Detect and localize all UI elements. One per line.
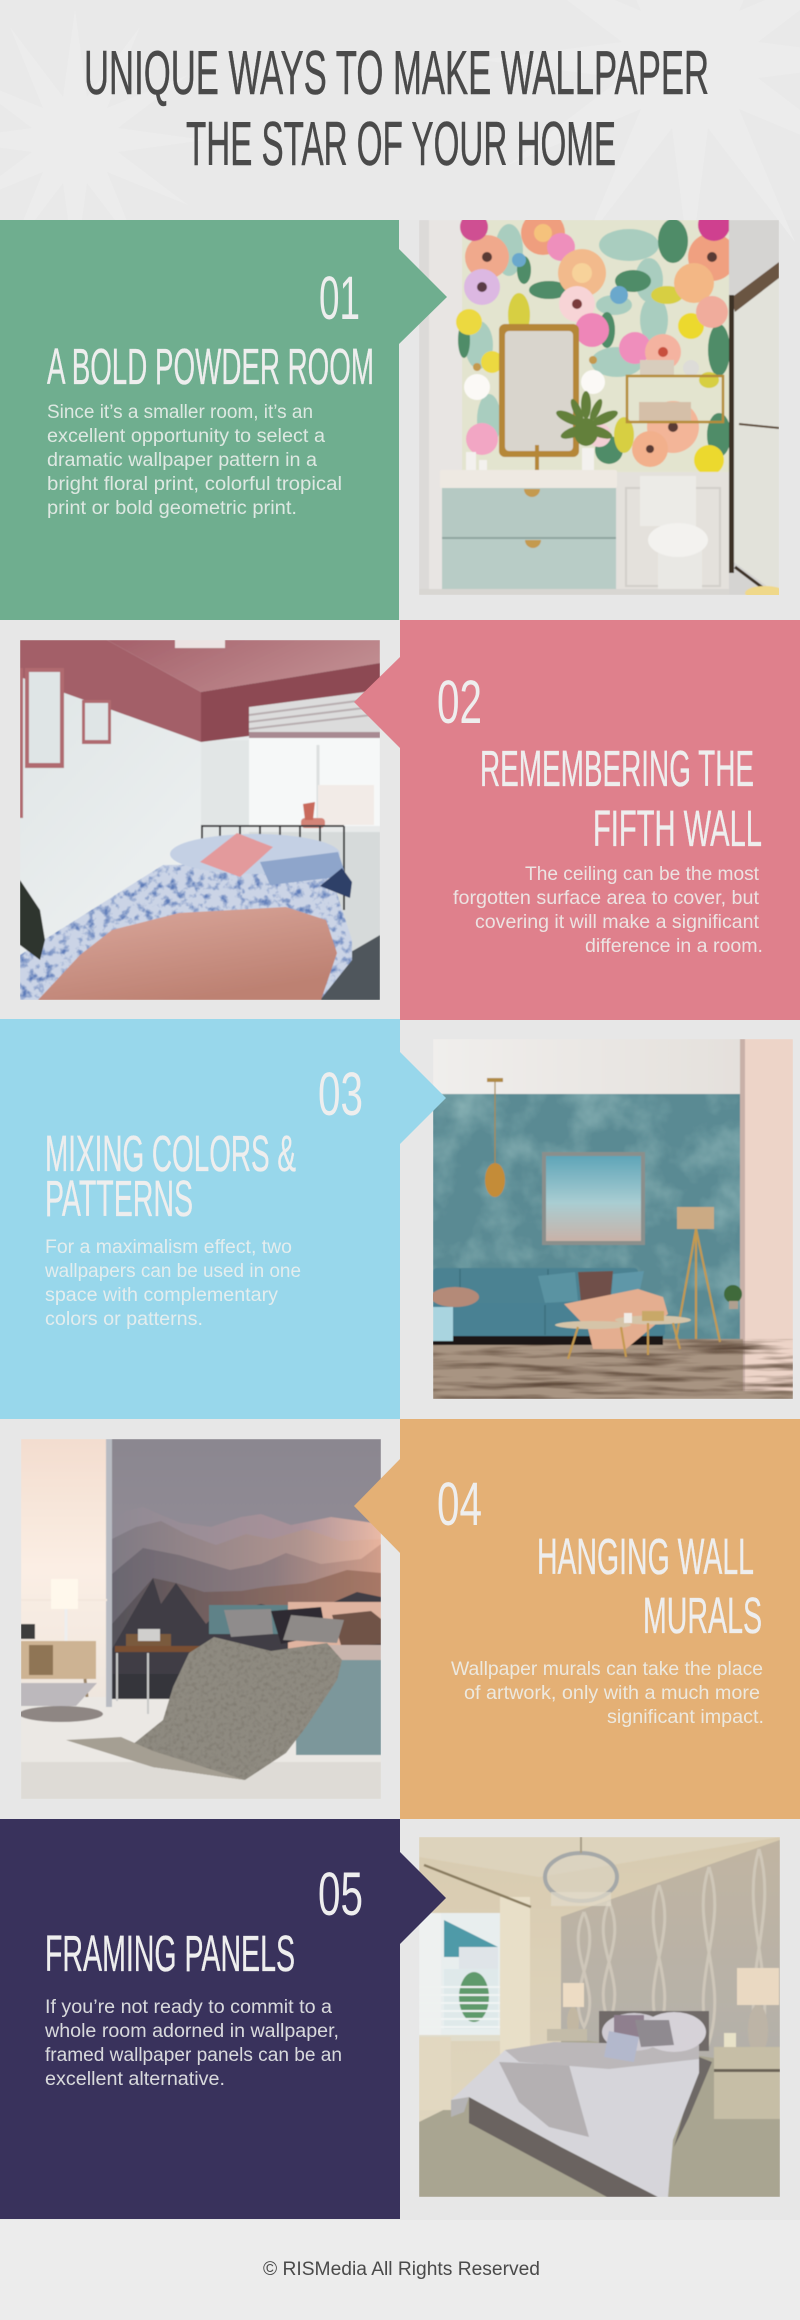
body text: significant impact.	[607, 1707, 764, 1728]
body text: colors or patterns.	[45, 1309, 203, 1330]
panel: 01 a bold powder room	[0, 209, 785, 620]
card: 03 blue	[0, 1019, 446, 1419]
body text: For a maximalism effect, two	[45, 1237, 292, 1258]
number 02: 02	[437, 668, 482, 736]
body text: Wallpaper murals can take the place	[451, 1659, 763, 1680]
body text: excellent alternative.	[45, 2069, 225, 2090]
heading: MIXING COLORS &	[45, 1125, 296, 1182]
number 04: 04	[437, 1470, 482, 1538]
footer	[0, 2220, 800, 2320]
photo: bedroom with patterned accent wall	[419, 1837, 780, 2197]
photo: mountain mural bedroom	[21, 1439, 381, 1799]
body text: excellent opportunity to select a	[47, 426, 325, 447]
panel: 05 framing panels	[0, 1819, 780, 2219]
heading	[480, 740, 762, 857]
number 05: 05	[318, 1860, 363, 1928]
body text: forgotten surface area to cover, but	[453, 888, 760, 909]
body text: wallpapers can be used in one	[44, 1261, 301, 1282]
number 03: 03	[318, 1060, 363, 1128]
body text	[44, 1237, 301, 1330]
body text	[44, 1997, 342, 2090]
body text	[47, 402, 342, 519]
card: 05 navy	[0, 1819, 446, 2219]
photo: teal living room	[433, 1039, 793, 1399]
card: 02 pink	[354, 620, 800, 1020]
body text: covering it will make a significant	[475, 912, 760, 933]
heading: FRAMING PANELS	[45, 1925, 295, 1982]
card: 01 green	[0, 220, 447, 620]
body text: print or bold geometric print.	[47, 498, 297, 519]
body text	[451, 1659, 764, 1728]
header band	[0, 0, 800, 270]
copyright text: © RISMedia All Rights Reserved	[263, 2259, 540, 2280]
body text: dramatic wallpaper pattern in a	[47, 450, 317, 471]
photo: floral powder room	[419, 220, 779, 595]
photo: bedroom with painted ceiling	[20, 640, 380, 1000]
panel: 04 hanging wall murals	[19, 1419, 800, 1819]
body text: whole room adorned in wallpaper,	[44, 2021, 339, 2042]
body text: space with complementary	[45, 1285, 279, 1306]
body text: The ceiling can be the most	[525, 864, 760, 885]
panel: 03 mixing colors and patterns	[0, 1019, 793, 1419]
number 01: 01	[319, 264, 360, 332]
title	[84, 39, 709, 179]
heading	[45, 1125, 296, 1227]
heading	[537, 1528, 762, 1644]
body text: Since it’s a smaller room, it’s an	[47, 402, 313, 423]
body text: difference in a room.	[585, 936, 763, 957]
panel: 02 remembering the fifth wall	[20, 620, 800, 1020]
body text: of artwork, only with a much more	[464, 1683, 760, 1704]
body text	[453, 864, 763, 957]
card: 04 orange	[354, 1419, 800, 1819]
body text: framed wallpaper panels can be an	[45, 2045, 342, 2066]
body text: If you’re not ready to commit to a	[45, 1997, 332, 2018]
body text: bright floral print, colorful tropical	[47, 474, 342, 495]
heading: A BOLD POWDER ROOM	[47, 338, 374, 395]
heading: PATTERNS	[45, 1170, 193, 1227]
